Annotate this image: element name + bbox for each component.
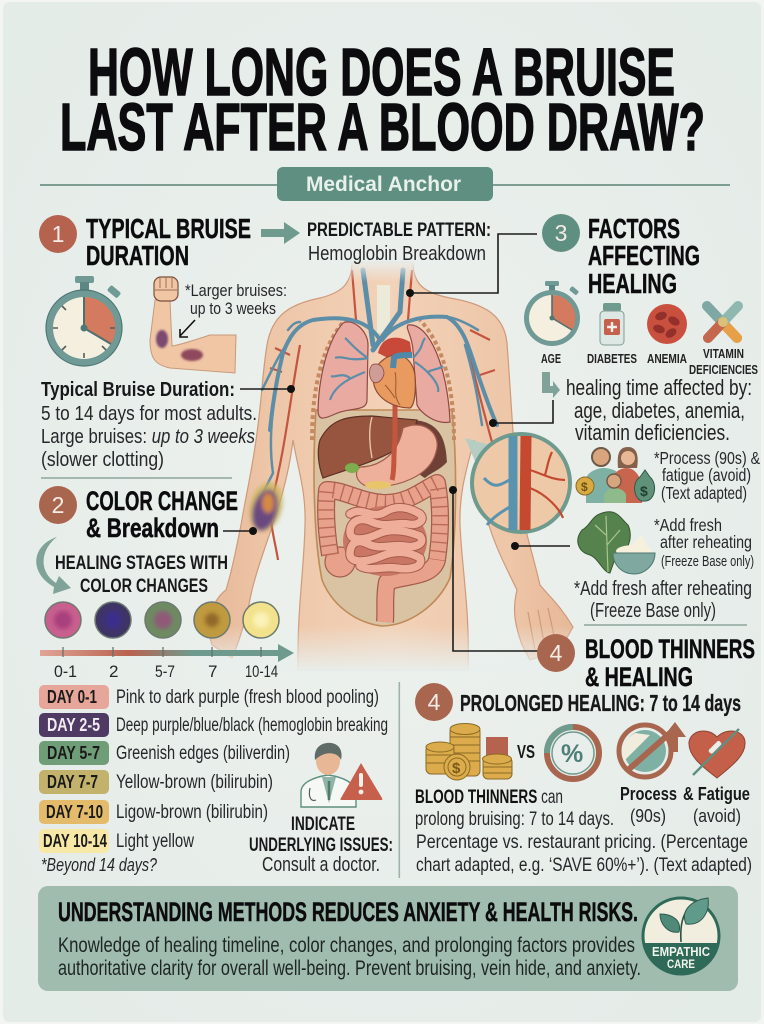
icon: bruised arm bbox=[150, 277, 236, 373]
number badge 1: 1 bbox=[52, 221, 64, 247]
footer body bbox=[58, 933, 641, 980]
heading 3: HEALING bbox=[588, 268, 677, 299]
icon: family with coins: $ bbox=[581, 480, 588, 494]
factor labels: DIABETES bbox=[587, 351, 637, 366]
icon: doctor with warning bbox=[301, 743, 382, 807]
section 1: typical bruise duration bbox=[39, 213, 491, 471]
icon: coins bbox=[426, 724, 512, 780]
badge: empathic care: EMPATHIC bbox=[652, 944, 711, 959]
note: larger bruises bbox=[185, 281, 287, 318]
note: add fresh bbox=[654, 515, 754, 570]
heading 4 bbox=[585, 634, 755, 692]
blood thinners text bbox=[415, 787, 614, 830]
abdominal cavity bbox=[314, 410, 456, 626]
note: add fresh second bbox=[574, 578, 752, 622]
number badge 4 second bbox=[415, 683, 453, 721]
gallbladder bbox=[345, 463, 359, 473]
pancreas bbox=[365, 481, 391, 489]
icon: stopwatch bbox=[46, 276, 122, 366]
duration text: (slower clotting) bbox=[41, 449, 164, 471]
badge: Medical Anchor: Medical Anchor bbox=[306, 173, 461, 196]
colon bbox=[326, 483, 440, 622]
number badge 4: 4 bbox=[550, 640, 563, 666]
day legend: DAY 5-7 bbox=[47, 743, 100, 763]
stomach bbox=[356, 425, 437, 487]
note: add fresh second: (Freeze Base only) bbox=[590, 600, 716, 622]
timeline arrow: 10-14 bbox=[245, 662, 278, 681]
fades bbox=[200, 625, 590, 673]
process and fatigue labels: (90s) bbox=[630, 806, 666, 826]
day legend: DAY 0-1 bbox=[47, 687, 97, 707]
number badge 4 second: 4 bbox=[428, 689, 441, 715]
bronchi bbox=[330, 338, 443, 400]
heart bbox=[369, 338, 415, 408]
note: process and fatigue bbox=[654, 448, 760, 503]
badge: empathic care: CARE bbox=[667, 957, 695, 971]
callout lines bbox=[223, 234, 570, 651]
process and fatigue labels: (avoid) bbox=[693, 806, 741, 826]
day legend: DAY 2-5 bbox=[47, 715, 100, 735]
predictable pattern text: PREDICTABLE PATTERN: bbox=[307, 220, 491, 241]
heading 1: TYPICAL BRUISE bbox=[86, 213, 251, 244]
indicate underlying issues bbox=[249, 814, 393, 876]
indicate underlying issues: INDICATE bbox=[291, 814, 355, 835]
heading 4: & HEALING bbox=[585, 662, 693, 692]
curved arrow bbox=[36, 537, 71, 594]
icon: age stopwatch bbox=[524, 281, 580, 346]
magnifier: blood vessel close-up bbox=[465, 434, 570, 532]
lung left bbox=[318, 322, 368, 418]
rib lining bbox=[312, 320, 454, 440]
icon: family with coins bbox=[576, 447, 655, 503]
note: larger bruises: up to 3 weeks bbox=[190, 299, 276, 318]
timeline arrow bbox=[40, 644, 294, 681]
section 3: factors affecting healing bbox=[524, 213, 760, 622]
day legend: DAY 7-7 bbox=[47, 772, 98, 792]
arrow to bruise bbox=[180, 320, 195, 337]
number badge 2 bbox=[39, 486, 77, 524]
icon: coins: $ bbox=[452, 760, 461, 777]
day legend: Light yellow bbox=[116, 831, 194, 852]
predictable pattern text bbox=[307, 220, 491, 265]
number badge 3 bbox=[542, 214, 580, 252]
day legend: Ligow-brown (bilirubin) bbox=[116, 802, 268, 823]
day legend bbox=[39, 685, 388, 853]
factor labels: ANEMIA bbox=[647, 351, 687, 366]
predictable pattern text: Hemoglobin Breakdown bbox=[308, 243, 486, 265]
timeline arrow: 7 bbox=[208, 662, 217, 681]
icon: anemia blood cells bbox=[647, 304, 687, 344]
process and fatigue labels bbox=[620, 784, 750, 826]
bent arrow bbox=[542, 372, 560, 398]
arteries bbox=[270, 270, 500, 560]
day legend: Deep purple/blue/black (hemoglobin breaking bbox=[116, 715, 388, 736]
note: add fresh: *Add fresh bbox=[654, 515, 722, 535]
day legend: DAY 10-14 bbox=[43, 831, 107, 851]
forearm bruise bbox=[244, 479, 288, 535]
veins bbox=[262, 270, 497, 495]
indicate underlying issues: Consult a doctor. bbox=[262, 854, 380, 876]
cecum bbox=[325, 547, 355, 577]
icon: prohibited with arrow bbox=[619, 722, 686, 777]
process and fatigue labels: Process bbox=[620, 784, 677, 804]
section 2: color change bbox=[36, 486, 393, 876]
day legend: Yellow-brown (bilirubin) bbox=[116, 772, 273, 793]
blood thinners text: BLOOD THINNERS can bbox=[415, 787, 563, 808]
arrow to pattern bbox=[261, 222, 300, 244]
subheading: COLOR CHANGES bbox=[80, 576, 208, 597]
badge: Medical Anchor bbox=[277, 167, 493, 201]
duration text bbox=[41, 378, 257, 471]
footer banner bbox=[38, 886, 738, 991]
footnote: *Beyond 14 days? bbox=[41, 855, 157, 875]
timeline arrow: 2 bbox=[109, 662, 118, 681]
heading 3 bbox=[588, 213, 700, 299]
number badge 1 bbox=[39, 215, 77, 253]
small intestine bbox=[343, 506, 427, 576]
indicate underlying issues: UNDERLYING ISSUES: bbox=[249, 835, 393, 856]
blood thinners text: prolong bruising: 7 to 14 days. bbox=[415, 809, 614, 830]
icon: percent ring: % bbox=[561, 740, 583, 768]
lung right bbox=[407, 325, 450, 422]
process and fatigue labels: & Fatigue bbox=[683, 784, 750, 804]
heading 1: DURATION bbox=[86, 240, 189, 271]
factor labels: AGE bbox=[541, 351, 561, 366]
timeline arrow: 5-7 bbox=[155, 662, 175, 681]
hand fingers bbox=[528, 608, 555, 650]
timeline arrow: 0-1 bbox=[54, 662, 77, 681]
heading 3: AFFECTING bbox=[588, 240, 700, 271]
heading 2: & Breakdown bbox=[86, 513, 219, 543]
heading 1 bbox=[86, 213, 251, 271]
duration text: Typical Bruise Duration: bbox=[41, 378, 235, 401]
title bbox=[60, 35, 705, 165]
pricing text bbox=[416, 832, 752, 876]
number badge 2: 2 bbox=[52, 492, 64, 518]
heading 2: COLOR CHANGE bbox=[86, 486, 238, 516]
factor labels bbox=[541, 346, 758, 377]
icon: heart with syringe bbox=[689, 729, 745, 778]
number badge 3: 3 bbox=[555, 220, 567, 246]
bruise colour circles bbox=[45, 602, 279, 638]
icon: diabetes bottle bbox=[600, 303, 624, 345]
duration text: 5 to 14 days for most adults. bbox=[41, 403, 257, 425]
icon: family with coins: $ bbox=[640, 483, 648, 499]
subheading: HEALING STAGES WITH bbox=[55, 553, 228, 574]
healing text bbox=[566, 375, 752, 445]
subheading bbox=[55, 553, 228, 597]
factor labels: VITAMIN bbox=[703, 346, 744, 361]
day legend: Greenish edges (biliverdin) bbox=[116, 743, 290, 764]
heading 2 bbox=[86, 486, 238, 543]
duration text: Large bruises: up to 3 weeks bbox=[41, 426, 255, 448]
liver spleen shadow bbox=[406, 420, 447, 478]
day legend: Pink to dark purple (fresh blood pooling) bbox=[116, 687, 379, 708]
day legend: DAY 7-10 bbox=[46, 802, 103, 822]
heading 3: FACTORS bbox=[588, 213, 680, 244]
icon: greens and yogurt bowl bbox=[578, 512, 655, 574]
trachea bbox=[377, 285, 390, 333]
anatomy figure bbox=[200, 260, 590, 673]
liver bbox=[318, 416, 417, 478]
badge: empathic care bbox=[643, 898, 719, 975]
section 4: blood thinners bbox=[415, 634, 755, 876]
icon: percent ring bbox=[547, 727, 599, 779]
number badge 4 bbox=[537, 634, 575, 672]
icon: vitamin capsules bbox=[707, 306, 738, 338]
note: larger bruises: *Larger bruises: bbox=[185, 281, 287, 300]
vs label: VS bbox=[517, 742, 535, 762]
body silhouette bbox=[209, 262, 573, 670]
